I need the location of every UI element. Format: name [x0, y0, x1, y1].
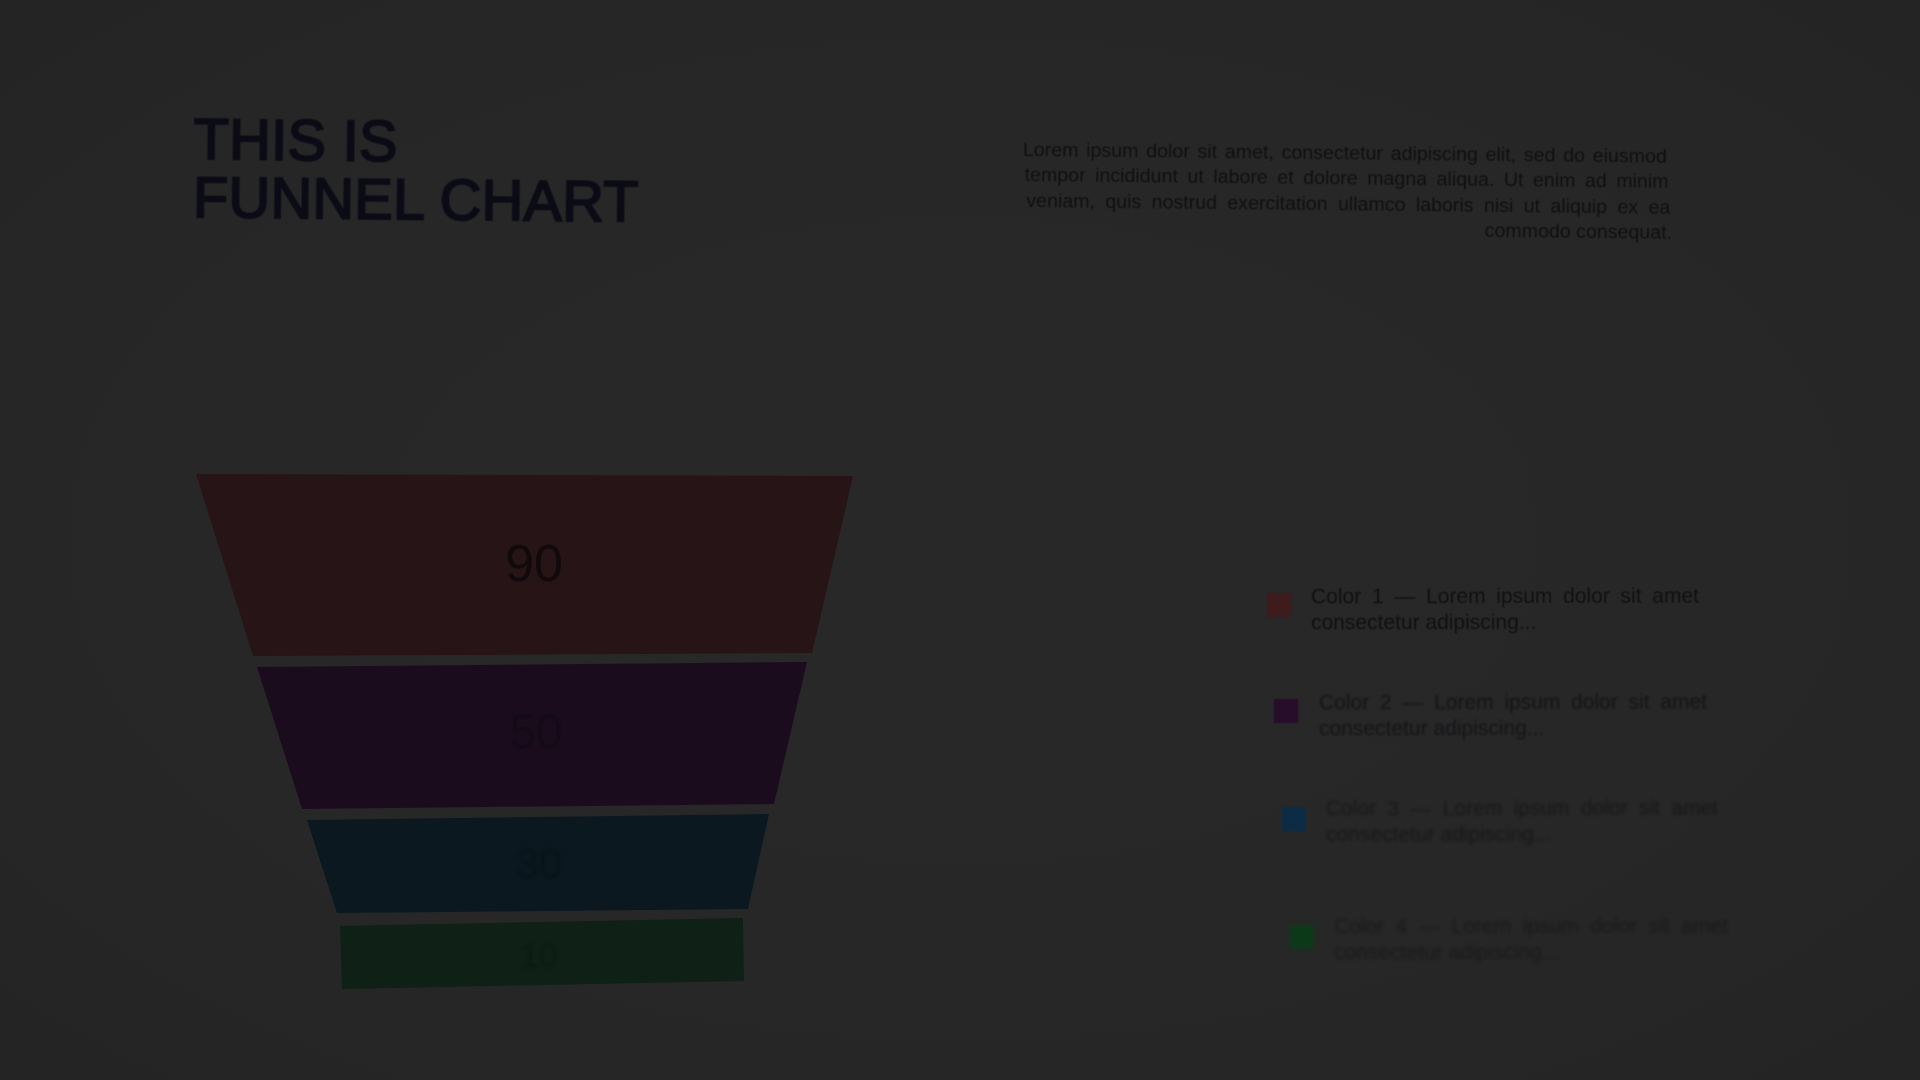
description paragraph — [1023, 139, 1672, 244]
legend text: color 2 — [1319, 691, 1707, 740]
description paragraph: Lorem ipsum dolor sit amet, consectetur adipiscing elit, sed do eiusmod — [1023, 139, 1667, 168]
legend text: color 1: Color 1 — Lorem ipsum dolor sit amet — [1311, 585, 1699, 608]
legend item: color 3 — [1282, 797, 1718, 846]
description paragraph: veniam, quis nostrud exercitation ullamco laboris nisi ut aliquip ex ea — [1026, 190, 1670, 219]
swatch: color 3 — [1282, 807, 1306, 831]
legend text: color 4: consectetur adipiscing... — [1334, 940, 1559, 964]
legend text: color 1: consectetur adipiscing... — [1311, 610, 1536, 634]
value 90: 90 — [505, 535, 563, 593]
legend text: color 3: Color 3 — Lorem ipsum dolor sit amet — [1326, 797, 1718, 820]
title: FUNNEL CHART — [193, 166, 639, 235]
swatch: color 2 — [1274, 699, 1298, 723]
legend text: color 4 — [1334, 915, 1728, 964]
legend text: color 1 — [1311, 585, 1699, 634]
legend text: color 3: consectetur adipiscing... — [1326, 822, 1551, 846]
value 50: 50 — [509, 706, 563, 759]
legend text: color 4: Color 4 — Lorem ipsum dolor sit amet — [1334, 915, 1728, 938]
value 10: 10 — [520, 937, 558, 975]
legend item: color 1 — [1267, 585, 1699, 634]
description paragraph: tempor incididunt ut labore et dolore magna aliqua. Ut enim ad minim — [1024, 164, 1669, 193]
legend text: color 2: Color 2 — Lorem ipsum dolor sit amet — [1319, 691, 1707, 714]
title: THIS IS — [193, 108, 398, 174]
funnel segment: 10 — [340, 918, 744, 989]
funnel segment: 30 — [307, 814, 769, 913]
swatch: color 1 — [1267, 593, 1291, 617]
legend item: color 4 — [1289, 915, 1728, 964]
funnel segment: 90 — [196, 474, 853, 656]
funnel segment: 50 — [257, 662, 807, 809]
legend text: color 3 — [1326, 797, 1718, 846]
legend item: color 2 — [1274, 691, 1707, 740]
swatch: color 4 — [1290, 925, 1314, 949]
legend text: color 2: consectetur adipiscing... — [1319, 716, 1544, 740]
title — [193, 108, 639, 235]
description paragraph: commodo consequat. — [1485, 220, 1672, 244]
value 30: 30 — [516, 840, 562, 887]
